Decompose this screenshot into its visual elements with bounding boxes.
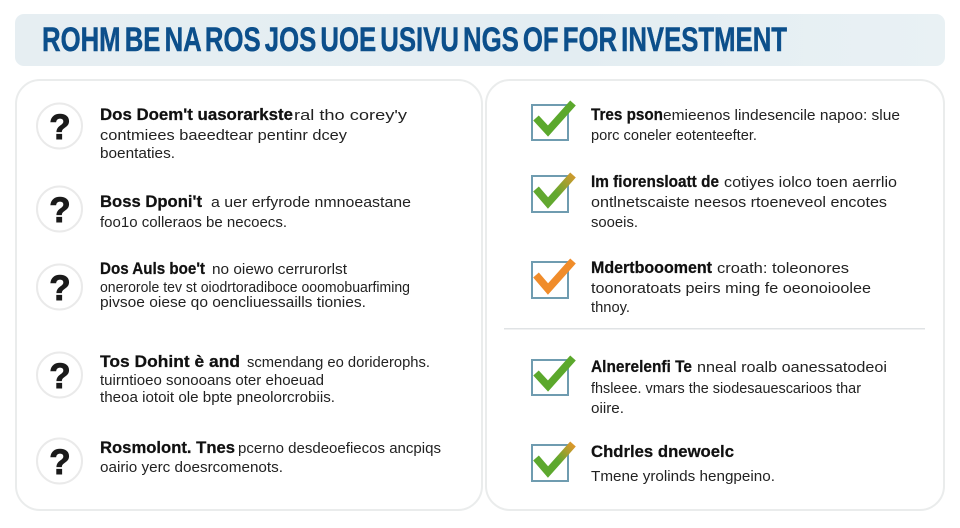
checklist item 4 [532, 358, 887, 417]
icon: question mark: ? [49, 108, 71, 147]
checklist text 4: fhsleee. vmars the siodesauescarioos thar [591, 380, 861, 397]
icon: question mark [37, 104, 82, 148]
icon: green check box [532, 358, 573, 395]
icon: question mark: ? [49, 443, 71, 482]
checklist text 1: porc coneler eotenteefter. [591, 127, 757, 144]
question text 4: tuirntioeo sonooans oter ehoeuad [100, 372, 324, 389]
checklist text 4: oiire. [591, 400, 624, 417]
question text 2: foo1o colleraos be necoecs. [100, 214, 287, 231]
icon: green check box [532, 103, 573, 140]
question text 2: Boss Dponi't [100, 193, 203, 211]
question text 1: boentaties. [100, 145, 175, 162]
icon: question mark [37, 438, 82, 484]
icon: question mark [37, 186, 82, 232]
panel: checklist [486, 80, 944, 510]
icon: question mark: ? [49, 357, 71, 396]
icon: green and amber check box [532, 444, 573, 481]
checklist text 2: ontlnetscaiste neesos rtoeneveol encotes [591, 194, 887, 211]
icon: question mark [37, 352, 82, 398]
checklist text 2: Im fiorensloatt de [591, 173, 719, 191]
question text 1 [100, 106, 408, 162]
question text 2 [100, 193, 411, 231]
question text 3: pivsoe oiese qo oencliuessaills tionies. [100, 294, 366, 311]
panel: questions [16, 80, 482, 510]
checklist text 3 [591, 259, 871, 316]
title banner [15, 14, 945, 66]
checklist text 3: toonoratoats peirs ming fe oeonoioolee [591, 280, 871, 297]
checklist text 1: Tres pson [591, 106, 663, 124]
checklist text 4: nneal roalb oanessatodeoi [697, 359, 887, 376]
question text 5: pcerno desdeoefiecos ancpiqs [238, 440, 441, 457]
checklist text 2 [591, 173, 897, 231]
question text 5: oairio yerc doesrcomenots. [100, 459, 283, 476]
question text 1: ral tho corey'y [294, 107, 408, 124]
question text 2: a uer erfyrode nmnoeastane [211, 194, 411, 211]
question text 3: Dos Auls boe't [100, 260, 205, 278]
checklist text 2: sooeis. [591, 214, 638, 231]
question text 3: no oiewo cerrurorlst [212, 261, 348, 278]
checklist text 1 [591, 106, 900, 144]
question text 5 [100, 439, 441, 476]
question text 1: Dos Doem't uasorarkste [100, 106, 293, 124]
checklist text 5: Chdrles dnewoelc [591, 443, 734, 461]
checklist text 3: thnoy. [591, 299, 630, 316]
icon: question mark: ? [49, 191, 71, 230]
question text 3: onerorole tev st oiodrtoradiboce ooomobuarfiming [100, 279, 410, 296]
icon: green and amber check box [532, 175, 573, 212]
checklist text 2: cotiyes iolco toen aerrlio [724, 174, 897, 191]
question text 3 [100, 260, 410, 311]
icon: question mark: ? [49, 269, 71, 308]
question text 4: theoa iotoit ole bpte pneolorcrobiis. [100, 389, 335, 406]
checklist text 3: croath: toleonores [717, 260, 849, 277]
checklist text 4 [591, 358, 887, 417]
question text 4: Tos Dohint è and [100, 353, 240, 371]
checklist text 1: emieenos lindesencile napoo: slue [663, 107, 900, 124]
question item 3 [37, 260, 410, 311]
question item 5 [37, 438, 441, 484]
checklist item 2 [532, 173, 897, 231]
checklist text 4: Alnerelenfi Te [591, 358, 692, 376]
icon: orange check box [532, 261, 573, 298]
question item 2 [37, 186, 411, 232]
question text 4: scmendang eo doriderophs. [247, 354, 430, 371]
question text 1: contmiees baeedtear pentinr dcey [100, 127, 348, 144]
icon: question mark [37, 264, 82, 310]
question item 4 [37, 352, 430, 406]
question item 1 [37, 104, 408, 162]
checklist item 5 [532, 443, 775, 485]
checklist item 1 [532, 103, 900, 144]
checklist text 3: Mdertboooment [591, 259, 712, 277]
question text 5: Rosmolont. Tnes [100, 439, 235, 457]
question text 4 [100, 353, 430, 406]
checklist text 5 [591, 443, 775, 485]
checklist text 5: Tmene yrolinds hengpeino. [591, 468, 775, 485]
checklist item 3 [532, 259, 871, 316]
